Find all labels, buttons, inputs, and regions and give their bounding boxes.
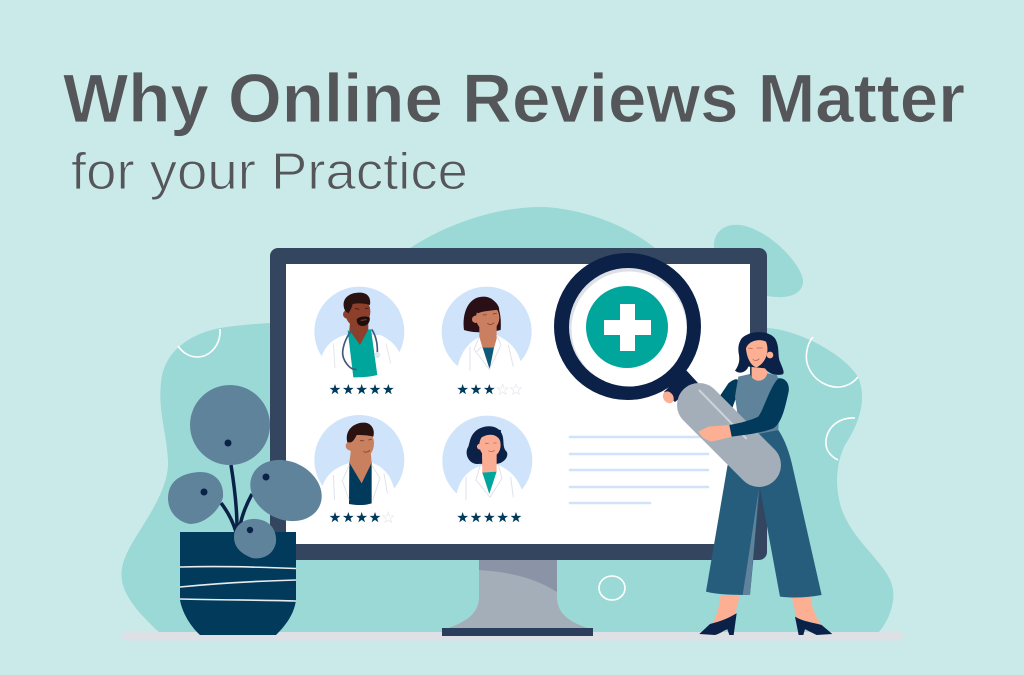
monitor — [270, 248, 767, 560]
plant in pot — [168, 385, 332, 635]
icon: medical cross — [586, 286, 668, 368]
decorative circle arcs — [178, 329, 858, 600]
woman holding magnifier — [661, 332, 832, 635]
magnifying glass lens — [554, 253, 701, 402]
background blob: small top right — [714, 225, 803, 297]
subtitle: for your Practice — [71, 142, 468, 200]
background blob: main — [121, 207, 893, 633]
monitor stand — [442, 560, 593, 636]
title: Why Online Reviews Matter — [63, 60, 965, 137]
magnifier handle — [699, 390, 759, 465]
doctor card: woman with wavy hair, five stars — [442, 416, 532, 522]
floor — [122, 632, 903, 640]
doctor card: man with stethoscope, five stars — [314, 287, 404, 394]
text placeholder lines — [570, 437, 708, 503]
doctor card: man in dark scrubs, four stars — [314, 415, 404, 522]
doctor card: woman with short hair, three stars — [442, 287, 532, 394]
